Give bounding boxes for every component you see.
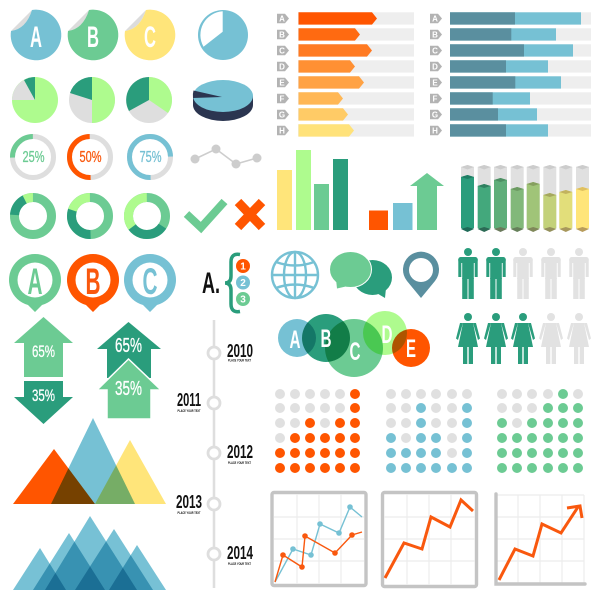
map pin badge C: C xyxy=(142,261,158,302)
row labels: orange chart xyxy=(277,14,289,135)
timeline entry 2012 xyxy=(227,442,253,465)
row labels: teal chart: A xyxy=(432,14,438,23)
progress ring 25%: 25% xyxy=(22,149,44,166)
overlapping circles A to E: E xyxy=(406,335,416,363)
growth bars with arrow xyxy=(369,173,444,230)
arrow up 65%: 65% xyxy=(32,342,55,361)
colored mountains xyxy=(13,418,166,504)
row labels: teal chart: D xyxy=(432,62,438,71)
blue mountains xyxy=(13,516,166,590)
vertical bar chart xyxy=(277,150,348,230)
icon: cross mark xyxy=(238,202,262,227)
sticker badge C xyxy=(125,10,175,60)
row labels: teal chart: G xyxy=(432,110,438,119)
brace list A 1 2 3: 1 xyxy=(240,262,246,272)
timeline entry 2013 xyxy=(176,492,202,515)
row labels: orange chart: C xyxy=(279,46,285,55)
icon: location pin xyxy=(403,252,439,298)
overlapping circles A to E: C xyxy=(350,338,360,366)
pie chart: blue with white sector xyxy=(198,10,248,60)
brace list A 1 2 3 xyxy=(202,254,250,312)
arrow line chart xyxy=(496,494,585,584)
donut chart 1 xyxy=(8,191,58,241)
map pin badge B xyxy=(67,254,119,312)
row labels: orange chart: G xyxy=(279,110,285,119)
map pin badge A: A xyxy=(28,261,42,302)
timeline entry 2014: 2014 xyxy=(227,543,253,563)
timeline entry 2012: 2012 xyxy=(227,442,253,462)
arrow down 35% xyxy=(14,381,73,424)
sticker badge C: C xyxy=(144,21,156,54)
stacked arrow 65% xyxy=(97,322,161,378)
donut chart 2 xyxy=(66,192,114,240)
timeline entry 2010: 2010 xyxy=(227,341,253,361)
sticker badge B xyxy=(68,10,118,60)
timeline entry 2010 xyxy=(227,341,253,362)
row labels: teal chart: E xyxy=(432,78,438,87)
timeline entry 2012: PLACE YOUR TEXT xyxy=(228,460,251,465)
row labels: teal chart: F xyxy=(433,94,438,103)
sticker badge A: A xyxy=(30,21,42,54)
progress ring 50% xyxy=(70,136,110,178)
row labels: teal chart: C xyxy=(432,46,438,55)
overlapping circles A to E: B xyxy=(320,325,332,353)
row labels: orange chart: F xyxy=(280,94,285,103)
timeline entry 2013: PLACE YOUR TEXT xyxy=(178,510,201,515)
timeline entry 2011 xyxy=(177,390,201,413)
overlapping circles A to E: A xyxy=(290,326,300,354)
timeline entry 2011: 2011 xyxy=(177,390,201,410)
arrow down 35%: 35% xyxy=(32,386,55,405)
pie chart 3 xyxy=(126,77,172,123)
female figures row xyxy=(456,313,591,364)
icon: speech bubbles xyxy=(330,252,392,298)
icon: check mark xyxy=(186,202,224,228)
teal stacked horizontal bar chart xyxy=(430,12,591,137)
small gray line chart xyxy=(190,144,262,168)
donut chart 3 xyxy=(121,190,173,242)
overlapping circles A to E xyxy=(278,311,430,377)
map pin badge A xyxy=(9,254,61,312)
timeline entry 2014: PLACE YOUR TEXT xyxy=(228,561,251,566)
brace list A 1 2 3: 3 xyxy=(240,294,246,306)
row labels: teal chart: B xyxy=(432,30,438,39)
dot matrix blue xyxy=(391,394,467,468)
male figures row xyxy=(458,248,589,299)
orange horizontal bar chart xyxy=(277,12,414,137)
pie chart 2 xyxy=(69,77,115,123)
stacked arrow 35% xyxy=(97,359,161,419)
arrow up 65% xyxy=(14,317,73,377)
tube level chart xyxy=(461,165,589,232)
brace list A 1 2 3: A. xyxy=(202,267,220,300)
progress ring 75%: 75% xyxy=(140,149,162,166)
timeline entry 2013: 2013 xyxy=(176,492,202,512)
row labels: orange chart: E xyxy=(279,78,285,87)
timeline entry 2014 xyxy=(227,543,253,566)
sticker badge B: B xyxy=(87,21,99,54)
framed line chart xyxy=(382,492,476,586)
map pin badge B: B xyxy=(86,261,100,302)
dot matrix green xyxy=(502,394,578,468)
row labels: orange chart: D xyxy=(279,62,285,71)
3D pie chart xyxy=(193,80,253,121)
row labels: teal chart xyxy=(430,14,442,135)
row labels: orange chart: B xyxy=(279,30,285,39)
overlapping circles A to E: D xyxy=(382,321,392,349)
progress ring 25% xyxy=(12,136,54,178)
stacked arrow 65%: 65% xyxy=(115,335,142,357)
timeline entry 2011: PLACE YOUR TEXT xyxy=(178,408,201,413)
timeline entry 2010: PLACE YOUR TEXT xyxy=(228,358,251,362)
row labels: orange chart: A xyxy=(279,14,285,23)
row labels: teal chart: H xyxy=(432,126,438,135)
progress ring 75% xyxy=(130,136,170,178)
line chart with two series xyxy=(272,492,366,586)
stacked arrow 35%: 35% xyxy=(115,378,142,400)
pie chart 1 xyxy=(12,77,58,123)
brace list A 1 2 3: 2 xyxy=(240,278,246,289)
row labels: orange chart: H xyxy=(279,126,285,135)
timeline xyxy=(176,320,253,588)
progress ring 50%: 50% xyxy=(80,149,102,166)
sticker badge A xyxy=(11,10,61,60)
map pin badge C xyxy=(124,254,176,312)
dot matrix orange xyxy=(280,394,355,468)
icon: globe xyxy=(272,252,318,298)
